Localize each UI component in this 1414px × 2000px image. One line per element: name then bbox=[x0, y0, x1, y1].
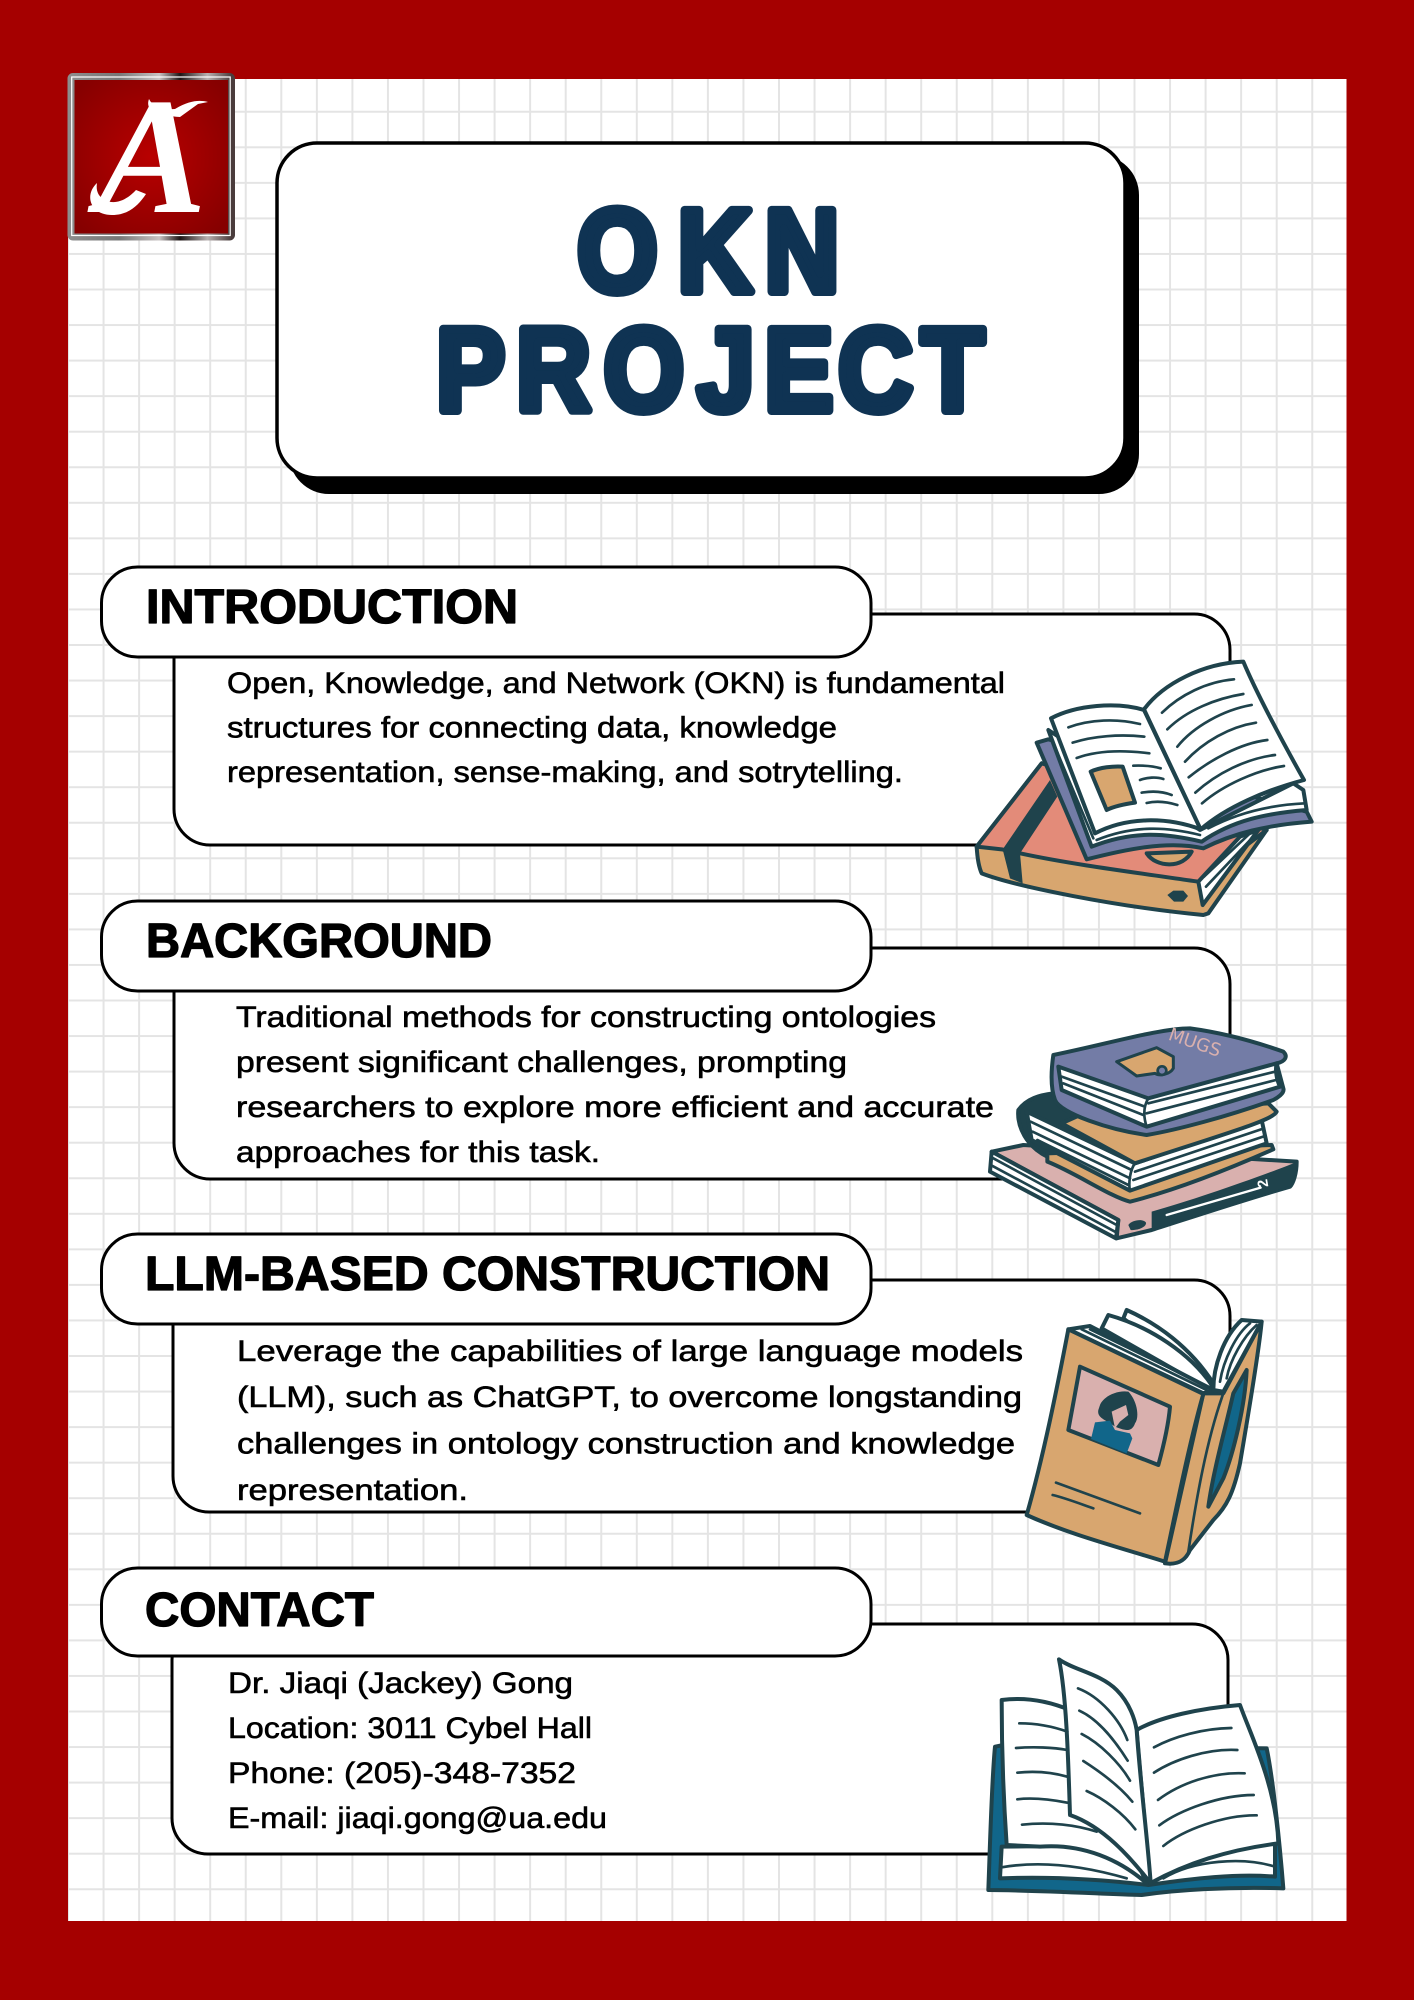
panel: LLM-based construction bbox=[102, 1234, 1262, 1564]
text: contact details: E-mail: jiaqi.gong@ua.edu bbox=[228, 1802, 607, 1835]
text: LLM body: (LLM), such as ChatGPT, to overcome longstanding bbox=[237, 1381, 1022, 1414]
title card bbox=[277, 143, 1139, 494]
title: PROJECT: PROJECT bbox=[436, 303, 984, 436]
text: background body: present significant challenges, prompting bbox=[236, 1046, 847, 1079]
text: LLM body: representation. bbox=[237, 1474, 468, 1507]
icon: open book with turning page bbox=[988, 1659, 1283, 1895]
heading: contact: CONTACT bbox=[145, 1584, 374, 1637]
text: contact details: Dr. Jiaqi (Jackey) Gong bbox=[228, 1667, 573, 1700]
text: contact details: Location: 3011 Cybel Hall bbox=[228, 1712, 592, 1745]
title: OKN: OKN bbox=[577, 184, 840, 317]
heading: LLM-based construction: LLM-BASED CONSTRUCTION bbox=[145, 1248, 830, 1301]
text: introduction body: structures for connecting data, knowledge bbox=[227, 712, 837, 744]
icon: upright book with portrait cover bbox=[1027, 1310, 1262, 1564]
text: LLM body: Leverage the capabilities of large language models bbox=[237, 1335, 1023, 1368]
panel: background bbox=[102, 901, 1297, 1238]
icon: open book on a red book bbox=[977, 662, 1312, 915]
text: background body bbox=[236, 1001, 994, 1169]
panel: contact bbox=[102, 1568, 1283, 1895]
text: background body: researchers to explore more efficient and accurate bbox=[236, 1091, 994, 1124]
logo: university A emblem bbox=[71, 64, 232, 248]
text: contact details bbox=[228, 1667, 607, 1835]
icon: stack of books: MUGS bbox=[1166, 1024, 1224, 1062]
logo: university A emblem: A bbox=[87, 64, 207, 248]
text: LLM body bbox=[237, 1335, 1023, 1507]
icon: stack of books bbox=[990, 1024, 1297, 1238]
panel: introduction bbox=[102, 567, 1312, 915]
text: introduction body: Open, Knowledge, and Network (OKN) is fundamental bbox=[227, 667, 1005, 700]
heading: background: BACKGROUND bbox=[146, 915, 492, 968]
text: background body: approaches for this task. bbox=[236, 1136, 600, 1169]
text: introduction body: representation, sense-making, and sotrytelling. bbox=[227, 756, 903, 789]
text: introduction body bbox=[227, 667, 1005, 789]
icon: stack of books: 2 bbox=[1255, 1178, 1272, 1189]
text: contact details: Phone: (205)-348-7352 bbox=[228, 1757, 576, 1790]
heading: introduction: INTRODUCTION bbox=[146, 581, 518, 634]
text: LLM body: challenges in ontology construction and knowledge bbox=[237, 1428, 1015, 1460]
text: background body: Traditional methods for constructing ontologies bbox=[236, 1001, 936, 1034]
